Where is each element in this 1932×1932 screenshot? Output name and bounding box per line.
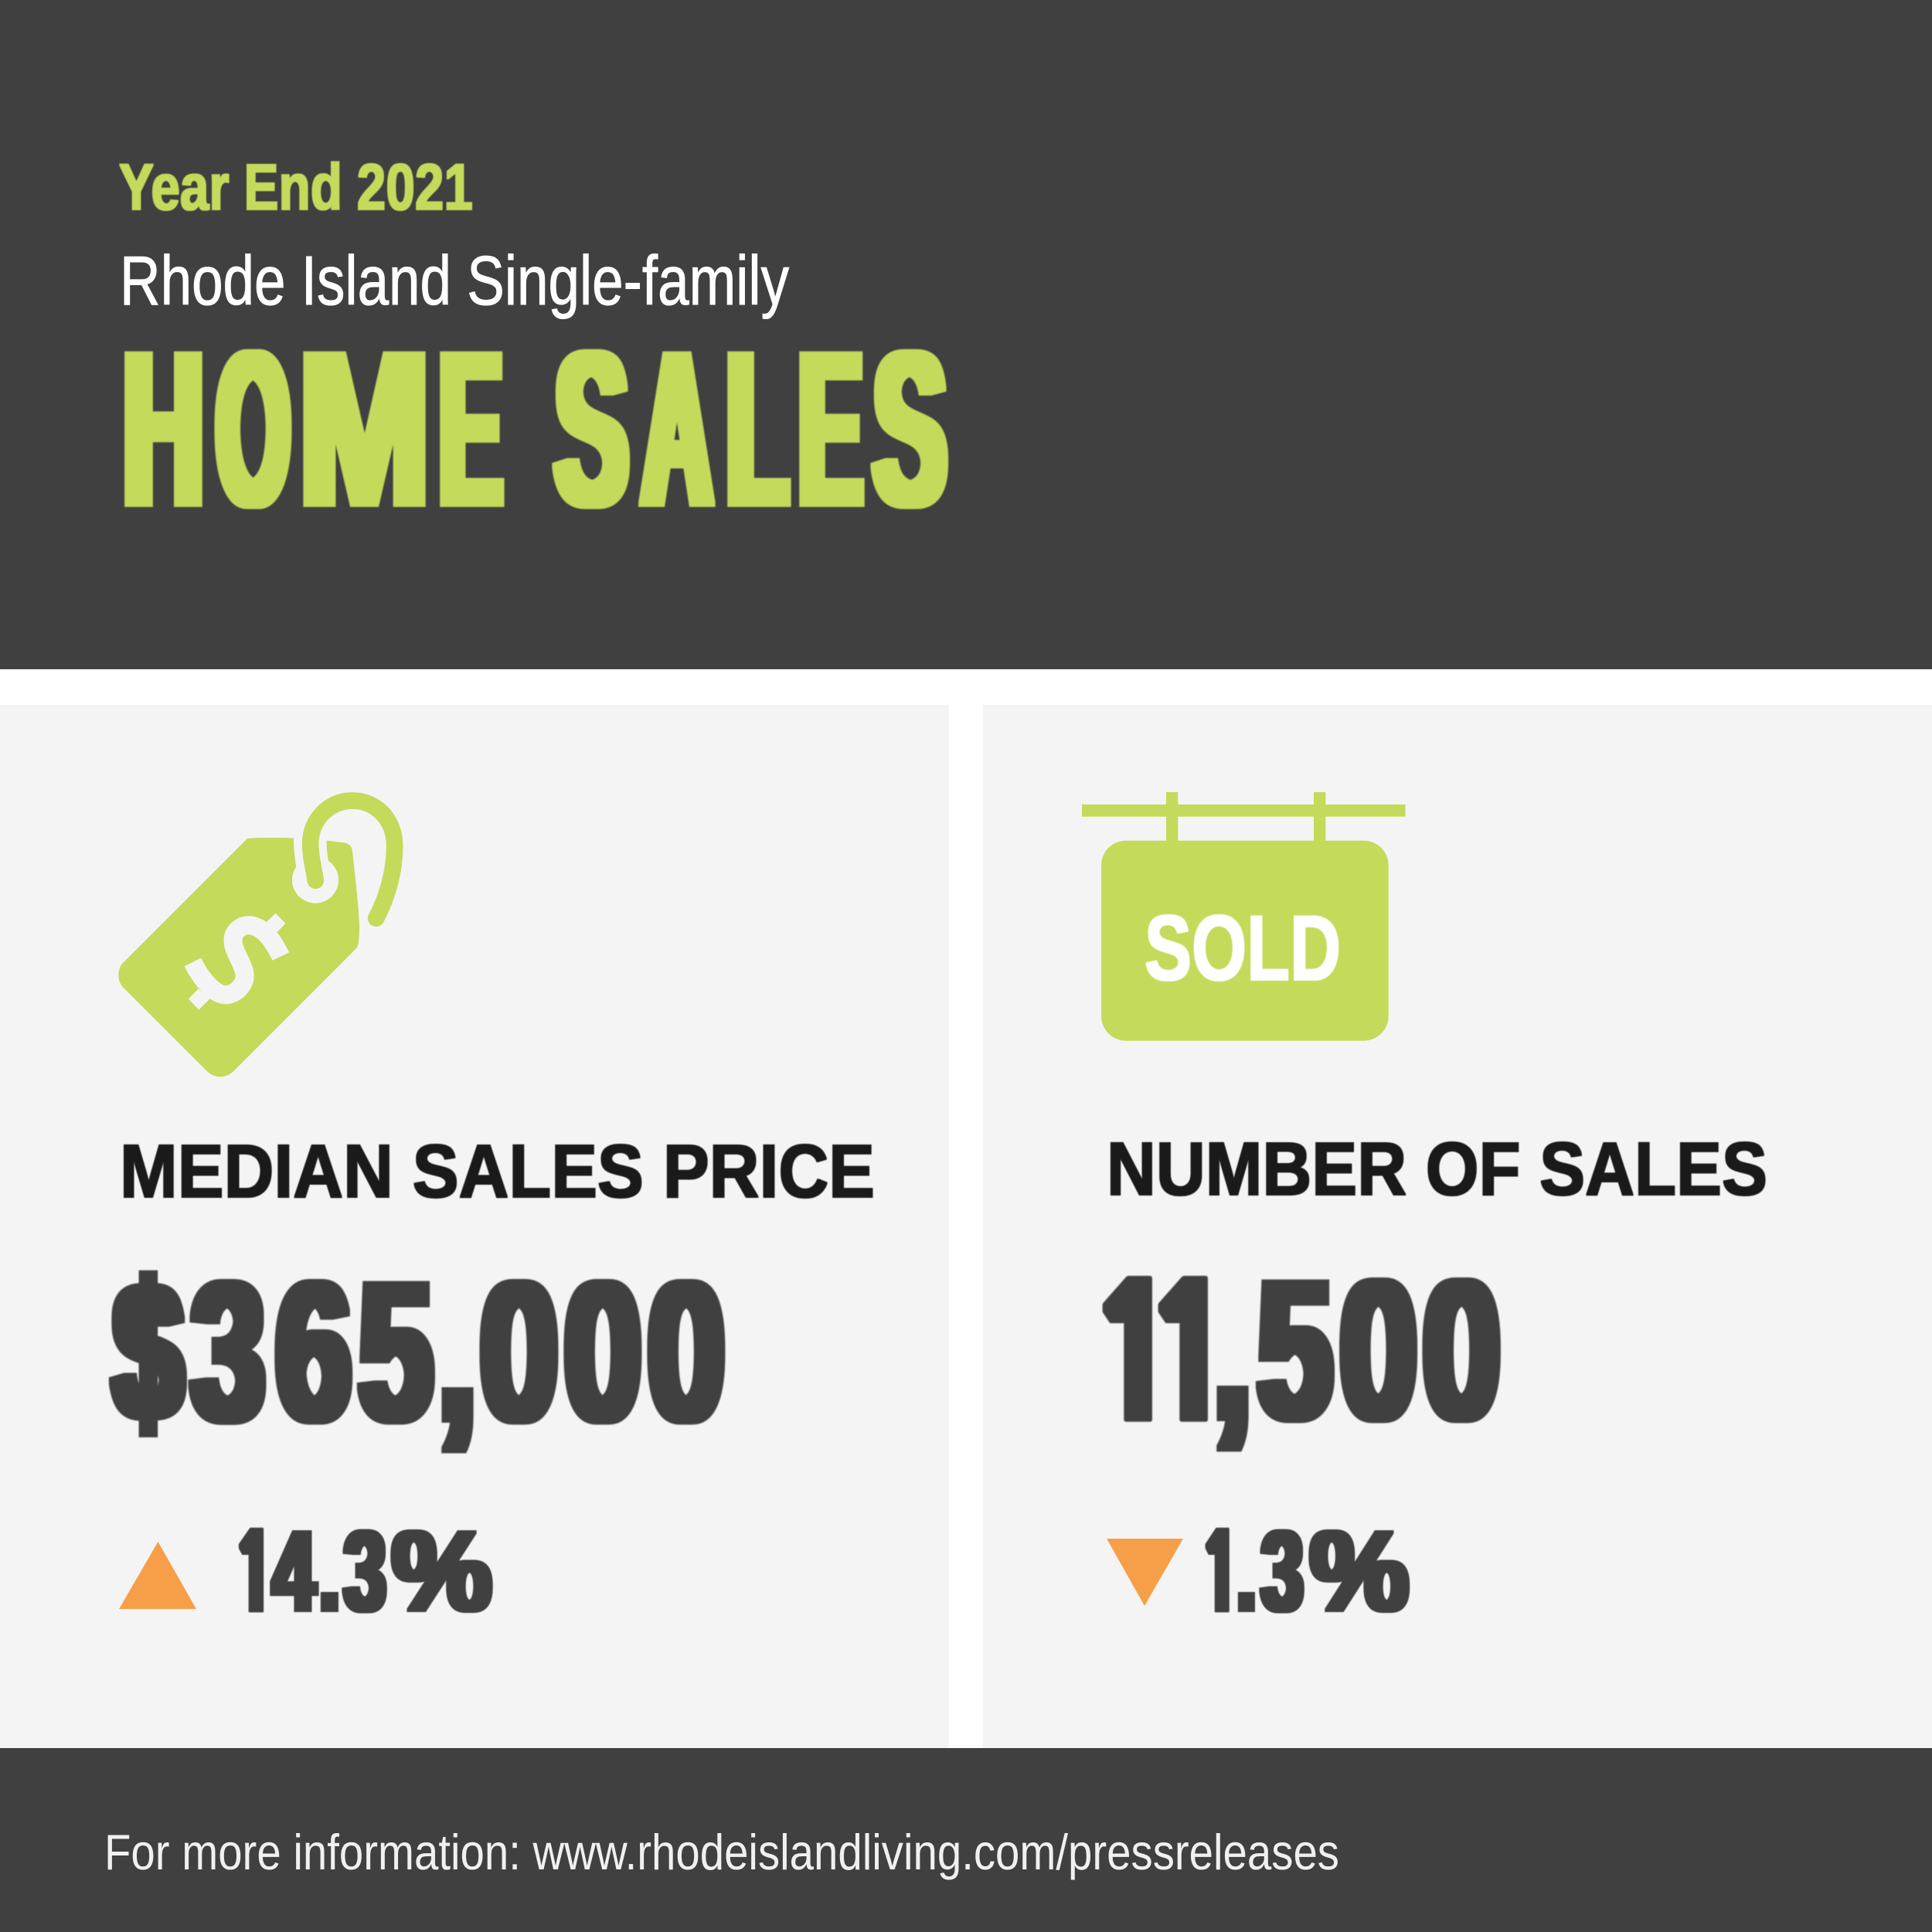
- value: sales count: 0: [1340, 1240, 1417, 1461]
- title: H: [124, 307, 204, 552]
- value: sales change: 3: [1261, 1508, 1303, 1635]
- subtitle: Rhode Island Single-family: [120, 243, 789, 320]
- value: price: 0: [480, 1242, 558, 1462]
- value: price: 6: [276, 1242, 352, 1462]
- eyebrow: year: Year End 2021: [119, 151, 473, 223]
- title: E: [799, 307, 862, 552]
- panel: number of sales: [983, 705, 1932, 1748]
- icon: sold sign: [1082, 792, 1405, 1041]
- panel: footer: [0, 1748, 1932, 1932]
- title: A: [642, 307, 712, 552]
- icon: up triangle: [119, 1542, 196, 1609]
- icon: price tag: [118, 801, 395, 1077]
- value: price change: 1: [233, 1520, 275, 1627]
- value: sales change: 1: [1201, 1520, 1240, 1627]
- panel: header: [0, 0, 1932, 669]
- title: L: [727, 307, 788, 552]
- title: O: [216, 307, 290, 552]
- value: sales count: 1: [1090, 1264, 1180, 1446]
- value: price: 0: [648, 1242, 725, 1462]
- heading: median sales price: MEDIAN SALES PRICE: [120, 1129, 875, 1213]
- value: sales count: 0: [1423, 1240, 1500, 1461]
- title: E: [440, 307, 502, 552]
- value: price: 0: [564, 1242, 641, 1462]
- value: price: $: [114, 1242, 182, 1462]
- value: price change: 4: [273, 1508, 315, 1635]
- value: sales count: 1: [1145, 1264, 1236, 1446]
- value: sales change: .: [1237, 1508, 1256, 1635]
- title: M: [299, 307, 430, 552]
- value: price: 5: [359, 1242, 433, 1462]
- title: S: [555, 307, 628, 552]
- value: price: 3: [191, 1242, 265, 1462]
- sign text: SOLD: [1145, 896, 1341, 1000]
- value: price change: %: [392, 1508, 492, 1635]
- value: price: ,: [438, 1242, 477, 1462]
- value: price change: .: [320, 1508, 339, 1635]
- value: price change: 3: [344, 1508, 386, 1635]
- value: sales count: 5: [1258, 1240, 1332, 1461]
- footer text: For more information: www.rhodeislandliving.com/pressreleases: [104, 1824, 1339, 1880]
- panel: median sales price: [0, 705, 949, 1748]
- panel: header: S: [873, 307, 947, 552]
- heading: number of sales: NUMBER OF SALES: [1107, 1127, 1767, 1211]
- icon: down triangle: [1107, 1539, 1183, 1606]
- value: sales change: %: [1310, 1508, 1409, 1635]
- value: sales count: ,: [1213, 1240, 1252, 1461]
